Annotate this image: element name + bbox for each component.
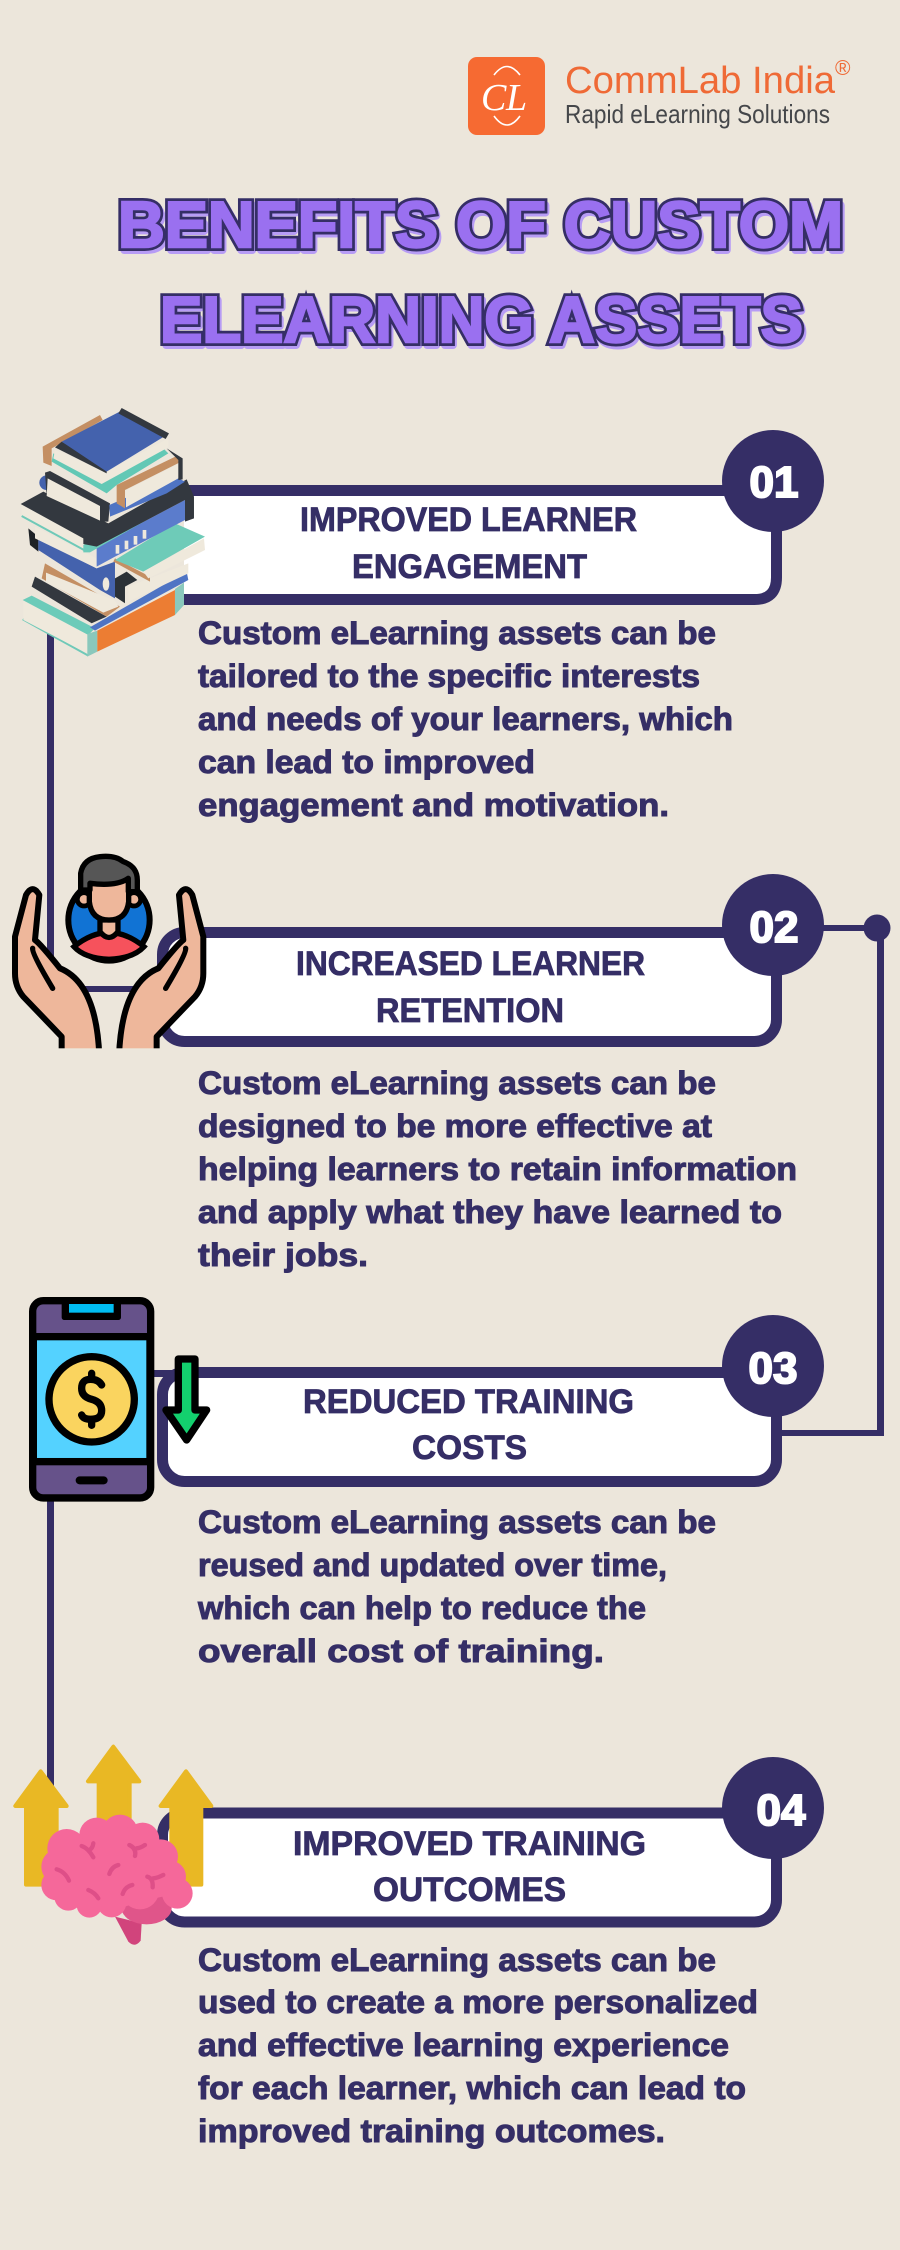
title: BENEFITS OF CUSTOM (118, 188, 843, 261)
title: BENEFITS OF CUSTOM (120, 191, 845, 264)
number badge 04: 04 (757, 1786, 806, 1835)
body text 2: helping learners to retain information (198, 1151, 797, 1187)
title card 2 (162, 932, 776, 1042)
body text 3: Custom eLearning assets can be (198, 1504, 716, 1540)
brain (41, 1815, 193, 1945)
body text 4: for each learner, which can lead to (198, 2070, 746, 2106)
body text 4: Custom eLearning assets can be (198, 1942, 716, 1978)
body text 3 (197, 1504, 716, 1669)
body text 3: which can help to reduce the (197, 1590, 646, 1626)
body text 1: tailored to the specific interests (198, 658, 700, 694)
left hand (15, 889, 99, 1057)
right hand (119, 889, 203, 1057)
number badge 01 (722, 430, 824, 532)
body text 2: and apply what they have learned to (198, 1194, 782, 1230)
body text 1: Custom eLearning assets can be (198, 615, 716, 651)
title card 1: ENGAGEMENT (352, 548, 587, 586)
body text 3: reused and updated over time, (198, 1547, 667, 1583)
title card 4: IMPROVED TRAINING (293, 1825, 646, 1863)
number badge 02: 02 (750, 903, 798, 952)
title: ELEARNING ASSETS (160, 283, 803, 356)
number badge 04 (722, 1757, 824, 1859)
panel: step 1 improved learner engagement (21, 408, 824, 823)
body text 4: improved training outcomes. (198, 2113, 665, 2149)
logo: CommLab India (468, 57, 851, 135)
title card 3: REDUCED TRAINING (303, 1383, 634, 1421)
logo: CommLab India: ® (835, 57, 851, 80)
title card 4: OUTCOMES (373, 1871, 566, 1909)
logo: CommLab India: C (481, 77, 507, 119)
panel: step 2 increased learner retention (15, 856, 824, 1273)
panel: step 4 improved training outcomes (15, 1747, 824, 2149)
rising arrows (15, 1747, 211, 1885)
body text 4 (198, 1942, 758, 2149)
body text 3: overall cost of training. (198, 1633, 604, 1669)
number badge 03: 03 (749, 1344, 797, 1393)
body text 2: designed to be more effective at (198, 1108, 712, 1144)
body text 2: Custom eLearning assets can be (198, 1065, 716, 1101)
body text 1: and needs of your learners, which (198, 701, 733, 737)
title: ELEARNING ASSETS (162, 286, 805, 359)
green down arrow (166, 1359, 207, 1440)
icon: hands holding a person (15, 856, 203, 1062)
title card 3: COSTS (412, 1429, 527, 1467)
body text 1: engagement and motivation. (198, 787, 669, 823)
connector lines between steps (47, 630, 890, 1860)
title card 3 (162, 1372, 776, 1482)
title card 4 (162, 1813, 776, 1922)
title (118, 188, 845, 359)
body text 4: and effective learning experience (198, 2027, 729, 2063)
panel: step 3 reduced training costs (33, 1301, 824, 1669)
number badge 02 (722, 874, 824, 976)
title card 1 (184, 490, 776, 600)
title: ELEARNING ASSETS (160, 283, 803, 356)
person avatar (68, 856, 150, 961)
body text 2 (198, 1065, 797, 1273)
body text 2: their jobs. (198, 1237, 368, 1273)
logo: CommLab India: L (505, 77, 527, 119)
logo: CommLab India: Rapid eLearning Solutions (565, 99, 830, 129)
title card 1: IMPROVED LEARNER (300, 501, 637, 539)
body text 1 (198, 615, 733, 823)
icon: phone with dollar coin and down arrow (33, 1301, 207, 1498)
logo: CommLab India: CommLab India (565, 60, 836, 102)
number badge 03 (722, 1315, 824, 1417)
title: BENEFITS OF CUSTOM (118, 188, 843, 261)
number badge 01: 01 (750, 458, 798, 507)
title card 2: INCREASED LEARNER (296, 945, 645, 983)
body text 4: used to create a more personalized (198, 1984, 758, 2020)
title card 2: RETENTION (376, 992, 564, 1030)
body text 1: can lead to improved (198, 744, 535, 780)
icon: stack of books (21, 408, 205, 657)
icon: brain with rising arrows (15, 1747, 211, 1945)
